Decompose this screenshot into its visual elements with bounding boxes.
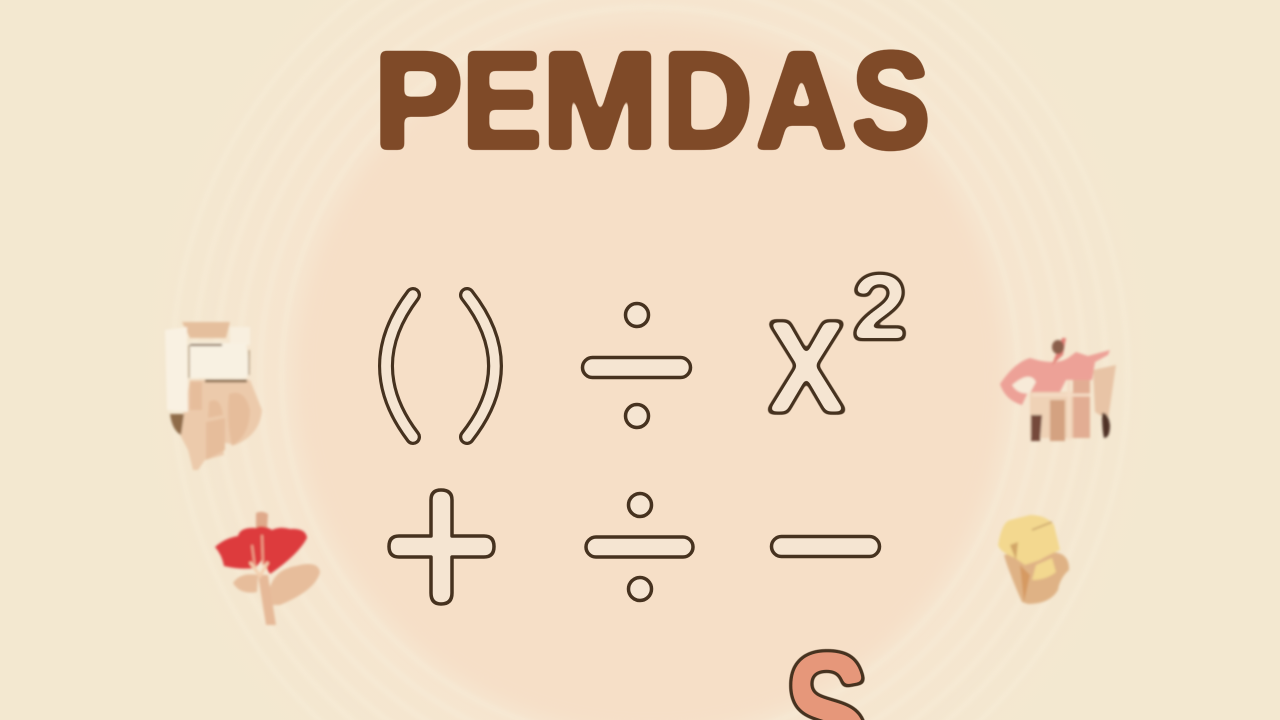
illustration: red flower — [215, 512, 320, 625]
icon: plus sign — [389, 490, 494, 604]
title: A — [756, 24, 847, 178]
icon: parentheses — [386, 295, 495, 437]
icon: x squared — [770, 260, 906, 445]
title: M — [542, 24, 658, 178]
icon: x squared: 2 — [853, 260, 906, 356]
icon: minus sign — [772, 536, 880, 556]
icon: division sign top row — [582, 304, 690, 428]
title — [374, 24, 930, 178]
central circle with concentric rings — [172, 0, 1128, 720]
title: P — [374, 24, 463, 178]
illustration: yellow flower — [998, 515, 1069, 604]
icon: division sign bottom row — [586, 494, 693, 600]
icon: x squared: x — [770, 262, 843, 445]
title: D — [663, 24, 753, 178]
title: E — [462, 24, 542, 178]
illustration: left hand holding paper — [165, 322, 262, 470]
illustration: right hand — [1000, 338, 1116, 441]
title: S — [852, 24, 930, 178]
